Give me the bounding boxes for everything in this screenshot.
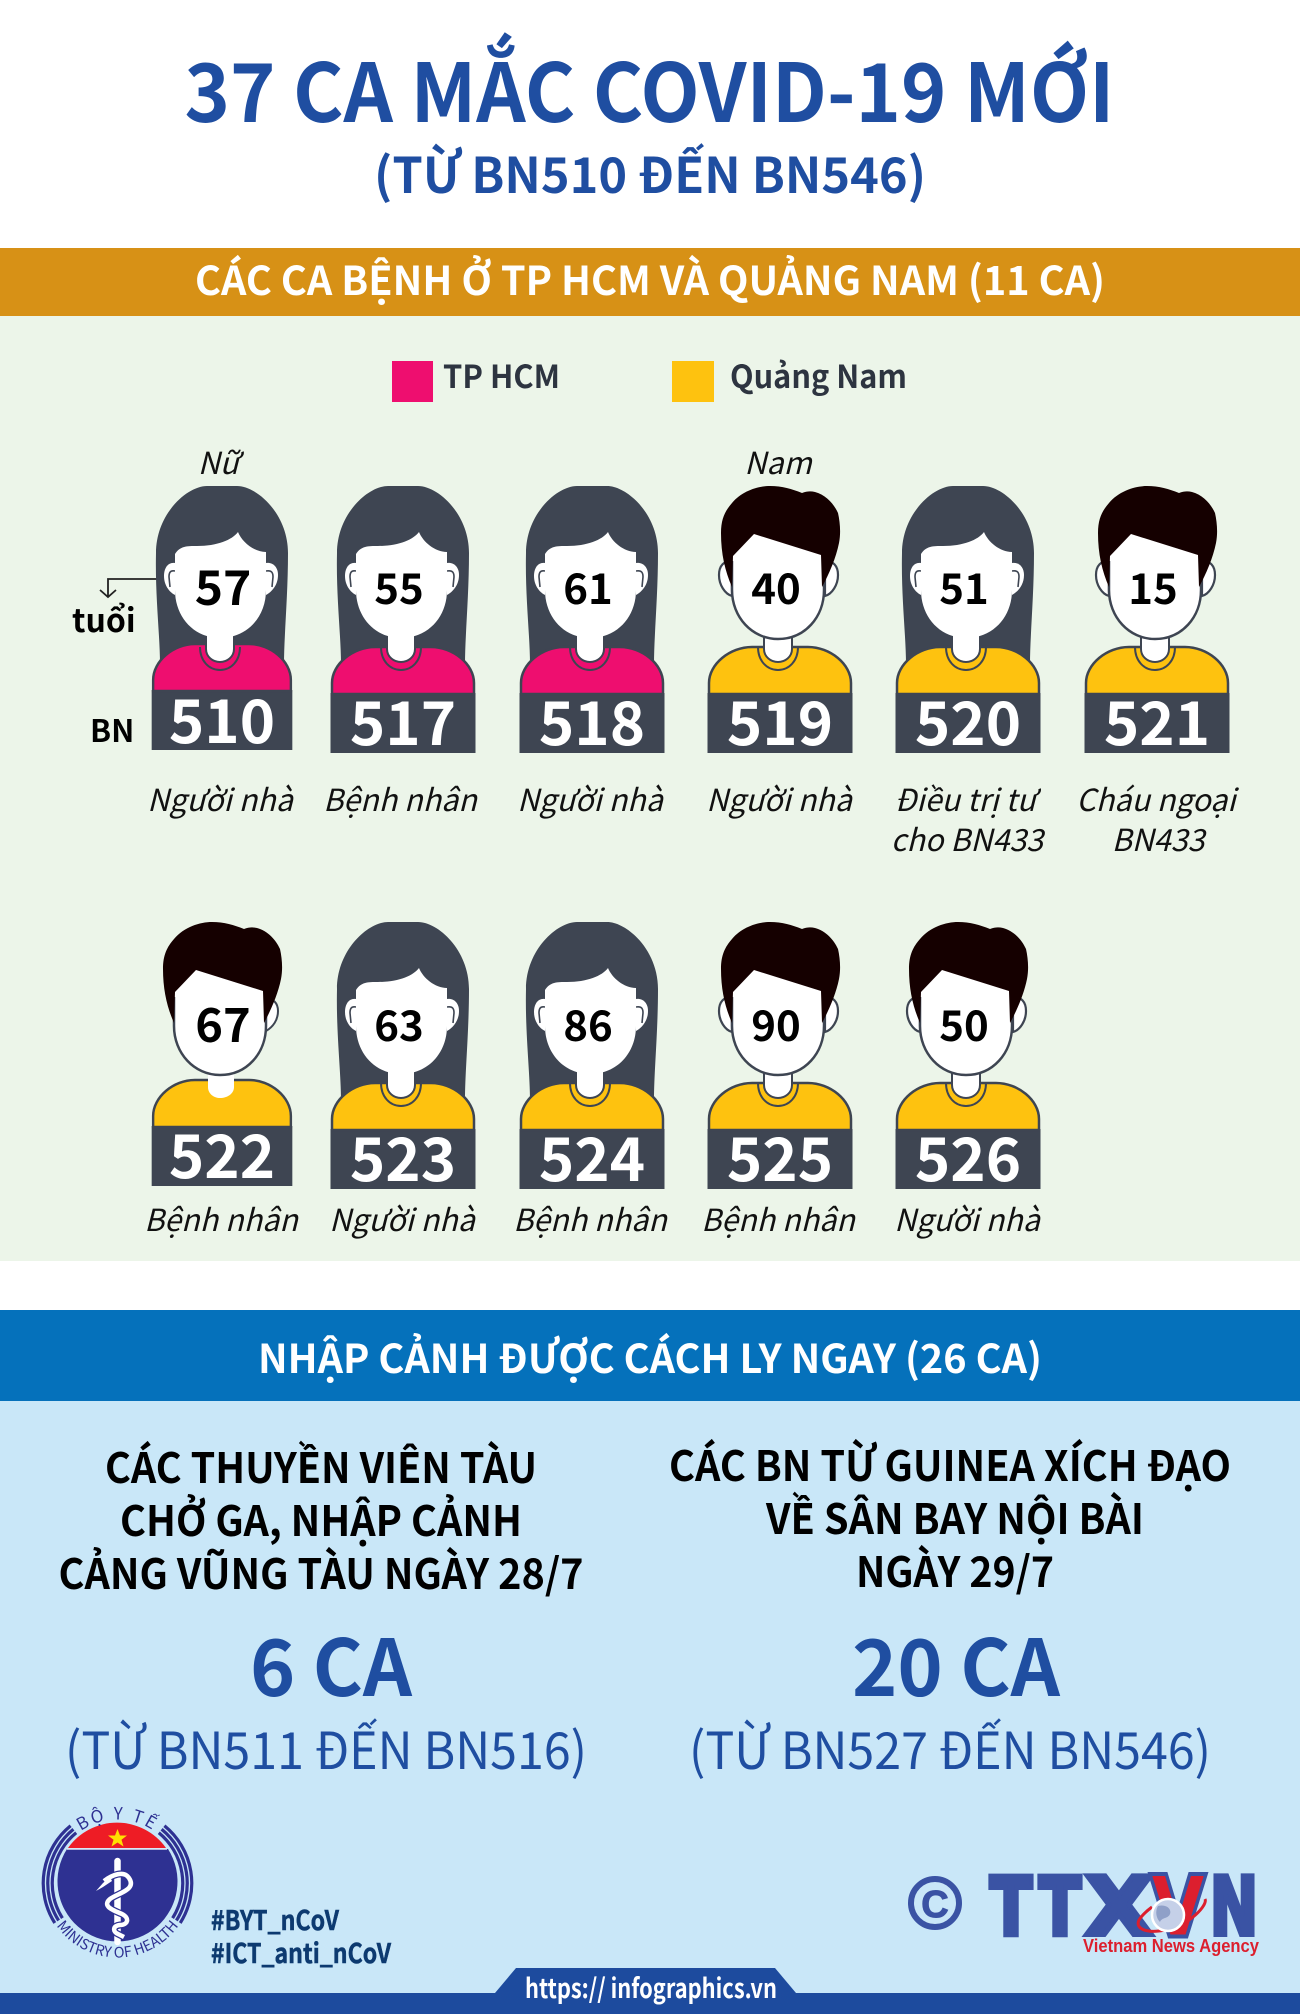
person 519: 519 — [727, 676, 833, 763]
gender labels: Nữ — [198, 439, 245, 483]
hashtags: #BYT_nCoV — [211, 1899, 339, 1938]
person 518: 518 — [539, 676, 645, 763]
section band — [0, 248, 1300, 316]
footer bar with website tab — [0, 1967, 1300, 2014]
person 525: 525 — [727, 1112, 833, 1199]
person 521: 521 — [1104, 676, 1210, 763]
person 519 — [708, 486, 852, 763]
person 522: 522 — [169, 1109, 275, 1196]
person 522 — [152, 922, 292, 1196]
legend: TP HCM — [443, 352, 560, 398]
person 522: 67 — [195, 987, 251, 1056]
person 521: 15 — [1128, 556, 1178, 617]
panel: HCM and Quang Nam cases — [0, 248, 1300, 1261]
gender labels: Nam — [744, 439, 813, 483]
person 510: 510 — [169, 674, 275, 761]
logo: TTXVN: T — [990, 1860, 1032, 1954]
right column: Guinea: CÁC BN TỪ GUINEA XÍCH ĐẠO — [669, 1433, 1231, 1494]
person 526 — [896, 922, 1040, 1199]
person 525: 90 — [751, 993, 801, 1054]
person 525 — [708, 922, 852, 1199]
annotation: age arrow: tuổi — [72, 596, 136, 642]
title — [184, 29, 1114, 208]
person 523: 63 — [374, 993, 424, 1054]
logo: TTXVN: N — [1210, 1860, 1258, 1954]
logo: TTXVN: Vietnam News Agency — [1083, 1936, 1259, 1956]
gender labels — [198, 439, 813, 483]
left column: ship crew: (TỪ BN511 ĐẾN BN516) — [65, 1710, 587, 1784]
person 517 — [330, 486, 476, 763]
person 524: 524 — [539, 1112, 645, 1199]
captions row 1 — [147, 776, 1239, 860]
annotation: BN label: BN — [90, 706, 134, 751]
panel: imported cases — [0, 1310, 1300, 2014]
right column: Guinea: 20 CA — [852, 1607, 1061, 1719]
hashtags: #ICT_anti_nCoV — [211, 1932, 391, 1971]
right column: Guinea: (TỪ BN527 ĐẾN BN546) — [689, 1710, 1211, 1784]
legend: Quảng Nam — [730, 352, 907, 398]
person 523: 523 — [350, 1112, 456, 1199]
left column: ship crew: CHỞ GA, NHẬP CẢNH — [120, 1488, 522, 1549]
annotation: age arrow — [72, 579, 196, 642]
logo: TTXVN: V — [1152, 1860, 1204, 1954]
logo: TTXVN: T — [1039, 1860, 1081, 1954]
logo: Ministry of Health — [42, 1806, 194, 1958]
left column: ship crew: CẢNG VŨNG TÀU NGÀY 28/7 — [58, 1541, 584, 1602]
captions row 2: Người nhà — [329, 1196, 477, 1240]
person 518 — [520, 486, 664, 763]
person 521 — [1084, 486, 1230, 763]
logo: TTXVN — [990, 1860, 1259, 1956]
captions row 1: Cháu ngoại — [1076, 776, 1239, 820]
captions row 1: Người nhà — [147, 776, 295, 820]
left column: ship crew: 6 CA — [250, 1607, 413, 1719]
title: (TỪ BN510 ĐẾN BN546) — [374, 137, 926, 208]
logo: TTXVN: X — [1085, 1860, 1153, 1954]
icon: copyright — [911, 1879, 959, 1927]
section band: CÁC CA BỆNH Ở TP HCM VÀ QUẢNG NAM (11 CA) — [195, 249, 1105, 307]
captions row 1: Người nhà — [706, 776, 854, 820]
captions row 1: Bệnh nhân — [323, 776, 478, 820]
captions row 1: Người nhà — [517, 776, 665, 820]
person 526: 50 — [939, 993, 989, 1054]
captions row 1: BN433 — [1112, 816, 1208, 860]
icon: copyright: C — [921, 1884, 949, 1926]
captions row 2: Người nhà — [894, 1196, 1042, 1240]
captions row 2: Bệnh nhân — [701, 1196, 856, 1240]
person 510: 57 — [195, 549, 251, 619]
person 523 — [330, 922, 476, 1199]
person 510 — [152, 486, 292, 761]
section band: NHẬP CẢNH ĐƯỢC CÁCH LY NGAY (26 CA) — [258, 1327, 1042, 1385]
right column: Guinea: VỀ SÂN BAY NỘI BÀI — [765, 1486, 1144, 1547]
person 518: 61 — [563, 556, 613, 617]
footer bar with website tab: https:// infographics.vn — [525, 1967, 777, 2006]
logo: Ministry of Health: BỘ Y TẾ — [76, 1806, 160, 1830]
legend — [392, 352, 907, 402]
captions row 2: Bệnh nhân — [144, 1196, 299, 1240]
person 524: 86 — [563, 993, 613, 1054]
hashtags — [211, 1899, 391, 1971]
person 519: 40 — [751, 556, 801, 617]
person 520: 520 — [915, 676, 1021, 763]
right column: Guinea: NGÀY 29/7 — [856, 1539, 1054, 1600]
left column: ship crew: CÁC THUYỀN VIÊN TÀU — [105, 1435, 537, 1496]
captions row 1: cho BN433 — [891, 816, 1046, 860]
right column: Guinea — [669, 1433, 1231, 1784]
person 524 — [520, 922, 664, 1199]
person 526: 526 — [915, 1112, 1021, 1199]
person 520 — [896, 486, 1040, 763]
title: 37 CA MẮC COVID-19 MỚI — [184, 29, 1114, 146]
logo: Ministry of Health: MINISTRY OF HEALTH — [57, 1920, 178, 1958]
captions row 2 — [144, 1196, 1042, 1240]
captions row 2: Bệnh nhân — [513, 1196, 668, 1240]
person 517: 517 — [350, 676, 456, 763]
captions row 1: Điều trị tư — [895, 776, 1042, 820]
left column: ship crew — [58, 1435, 587, 1784]
section band — [0, 1310, 1300, 1401]
person 517: 55 — [374, 556, 424, 617]
person 520: 51 — [939, 556, 989, 617]
